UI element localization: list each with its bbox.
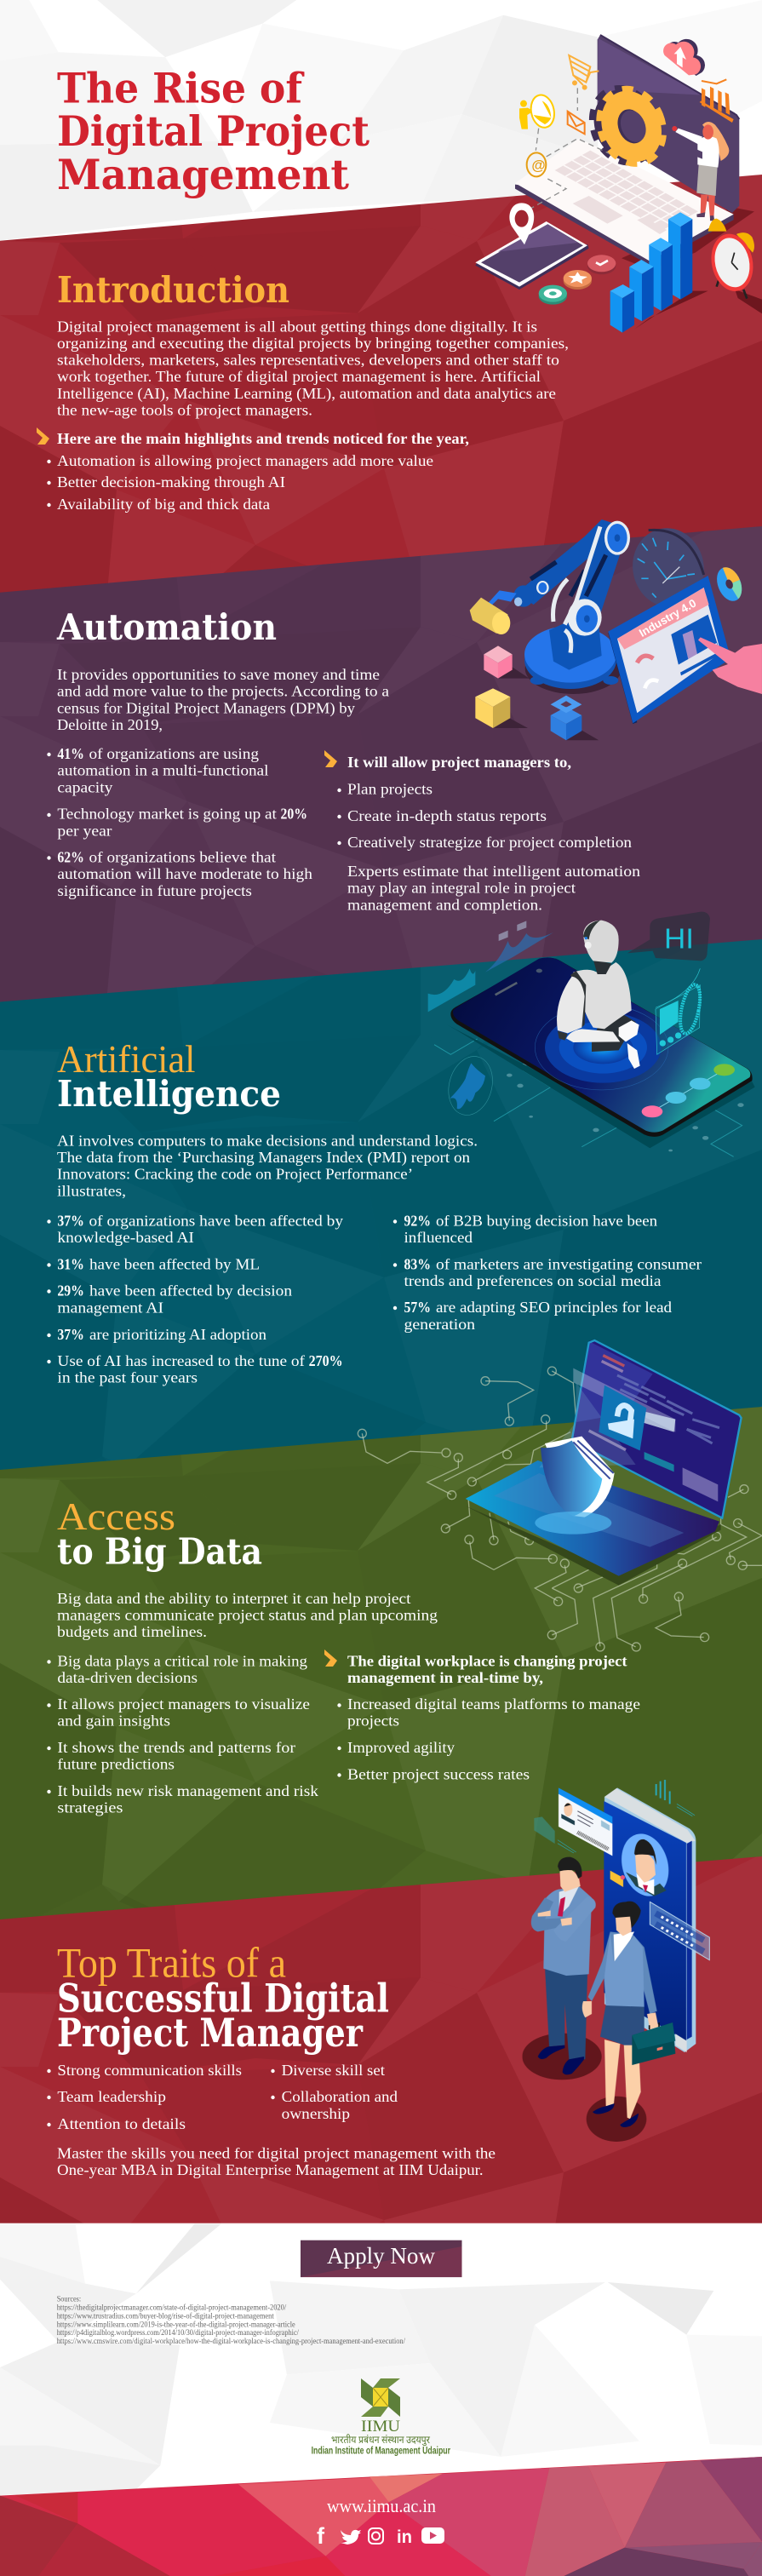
laptop bbox=[466, 1340, 742, 1586]
AI paragraph: illustrates, bbox=[57, 1183, 126, 1200]
automation statistics list: of organizations believe that bbox=[89, 848, 276, 865]
data dots bbox=[507, 1064, 744, 1151]
digital workplace list: The digital workplace is changing project bbox=[347, 1652, 627, 1669]
icon: shopping cart bbox=[569, 55, 599, 89]
icon: gear bbox=[583, 78, 672, 173]
man bbox=[522, 1857, 602, 2080]
heading: artificial intelligence: Artificial bbox=[57, 1037, 196, 1081]
automation paragraph: It provides opportunities to save money and time bbox=[57, 666, 380, 683]
automation statistics list: 20% bbox=[281, 806, 307, 823]
project manager list: Plan projects bbox=[347, 781, 433, 798]
highlights list: Here are the main highlights and trends noticed for the year, bbox=[57, 430, 469, 447]
project manager list: Creatively strategize for project completion bbox=[347, 834, 632, 851]
icon: growth chart bbox=[700, 79, 734, 123]
automation statistics list: capacity bbox=[57, 778, 112, 795]
traits list right: ownership bbox=[282, 2105, 350, 2122]
robot arm bbox=[487, 519, 630, 694]
illustration: robot arm and industry 4.0 tablet bbox=[470, 519, 762, 740]
heading: top traits: Top Traits of a bbox=[57, 1939, 286, 1987]
smartphone bbox=[447, 957, 755, 1148]
tablet: industry 4.0: Industry 4.0 bbox=[637, 597, 698, 640]
AI statistics left column: management AI bbox=[57, 1299, 163, 1316]
icon: youtube bbox=[421, 2527, 444, 2544]
introduction paragraph bbox=[57, 318, 569, 419]
automation statistics list: 62% bbox=[57, 848, 84, 865]
pink cube bbox=[484, 645, 530, 679]
website url: www.iimu.ac.in bbox=[327, 2495, 436, 2516]
laptop bbox=[515, 35, 754, 270]
AI statistics right column: 83% bbox=[404, 1255, 431, 1272]
logo: IIMU: भारतीय प्रबंधन संस्थान उदयपुर bbox=[331, 2434, 431, 2447]
tablet: industry 4.0 bbox=[608, 576, 730, 724]
heading: artificial intelligence bbox=[57, 1037, 281, 1115]
automation statistics list: significance in future projects bbox=[57, 882, 252, 899]
AI paragraph: AI involves computers to make decisions and understand logics. bbox=[57, 1133, 478, 1150]
heading: top traits: Project Manager bbox=[57, 2010, 364, 2056]
area charts bbox=[428, 921, 553, 1012]
title bbox=[57, 64, 370, 199]
automation statistics list: Technology market is going up at bbox=[57, 806, 277, 823]
icon: linkedin: in bbox=[397, 2527, 412, 2547]
AI statistics right column: of marketers are investigating consumer bbox=[436, 1255, 702, 1272]
traits list right: Diverse skill set bbox=[282, 2062, 385, 2079]
big data left list: future predictions bbox=[57, 1756, 175, 1773]
yellow cube bbox=[475, 688, 528, 728]
pie chart icon bbox=[713, 564, 747, 605]
highlights list: Availability of big and thick data bbox=[57, 496, 270, 513]
automation statistics list bbox=[47, 745, 312, 899]
icon: arrow marker bbox=[37, 427, 49, 445]
AI statistics left column: 29% bbox=[57, 1282, 84, 1299]
automation statistics list: 41% bbox=[57, 745, 84, 762]
button: apply now: Apply Now bbox=[327, 2243, 435, 2269]
icon: facebook: f bbox=[317, 2523, 325, 2549]
blue container bbox=[551, 696, 599, 740]
panel: automation background bbox=[0, 526, 762, 1001]
project manager list: may play an integral role in project bbox=[347, 879, 576, 896]
project manager list: It will allow project managers to, bbox=[347, 754, 571, 771]
big data paragraph: Big data and the ability to interpret it can help project bbox=[57, 1590, 410, 1607]
panel: introduction background bbox=[0, 175, 762, 593]
icon: envelope bbox=[568, 112, 585, 134]
lower white panel background bbox=[0, 2223, 762, 2576]
big data left list: It allows project managers to visualize bbox=[57, 1695, 310, 1713]
title: Management bbox=[57, 150, 349, 199]
AI statistics left column: 270% bbox=[309, 1352, 343, 1369]
introduction paragraph: organizing and executing the digital projects by bringing together companies, bbox=[57, 335, 569, 352]
big data left list: strategies bbox=[57, 1799, 123, 1816]
lock card bbox=[599, 1386, 646, 1450]
automation paragraph: census for Digital Project Managers (DPM) by bbox=[57, 699, 355, 717]
automation statistics list: per year bbox=[57, 823, 112, 840]
sources: https://thedigitalprojectmanager.com/state-of-digital-project-management-2020/ bbox=[57, 2303, 287, 2313]
robot bbox=[557, 921, 640, 1069]
big data paragraph: managers communicate project status and plan upcoming bbox=[57, 1607, 438, 1624]
AI statistics right column: 57% bbox=[404, 1299, 431, 1316]
icon: person with pie chart bbox=[519, 93, 557, 129]
big data left list bbox=[47, 1652, 318, 1816]
glowing rings bbox=[535, 1005, 668, 1090]
icon: arrow marker bbox=[324, 1649, 337, 1667]
icon: at sign bbox=[527, 152, 546, 176]
heading: access to big data bbox=[57, 1495, 262, 1572]
traits list left: Strong communication skills bbox=[57, 2062, 242, 2079]
heading: automation: Automation bbox=[56, 606, 277, 648]
automation statistics list: automation will have moderate to high bbox=[57, 865, 312, 882]
AI statistics right column: 92% bbox=[404, 1213, 431, 1230]
logo: IIMU: Indian Institute of Management Udaipur bbox=[312, 2447, 450, 2457]
icon: instagram bbox=[369, 2528, 383, 2544]
heading: top traits: Successful Digital bbox=[57, 1975, 389, 2021]
sources: Sources: bbox=[57, 2296, 81, 2304]
icon: arrow marker bbox=[324, 750, 337, 767]
traits list left: Attention to details bbox=[57, 2115, 186, 2132]
illustration: AI robot on smartphone bbox=[428, 912, 755, 1156]
shield bbox=[535, 1437, 615, 1535]
dashed connector lines bbox=[528, 88, 609, 210]
big data paragraph bbox=[57, 1590, 438, 1640]
logo: IIMU bbox=[312, 2378, 450, 2457]
panel: top traits background bbox=[0, 1856, 762, 2223]
social icons bbox=[317, 2523, 444, 2549]
AI statistics left column: 37% bbox=[57, 1326, 84, 1343]
holographic panel bbox=[656, 968, 704, 1054]
digital workplace list: management in real-time by, bbox=[347, 1669, 543, 1686]
AI statistics right column: influenced bbox=[404, 1229, 473, 1246]
sources: https://www.simplilearn.com/2019-is-the-year-of-the-digital-project-manager-article bbox=[57, 2321, 295, 2330]
AI statistics left column bbox=[47, 1213, 343, 1386]
digital workplace list: Increased digital teams platforms to manage bbox=[347, 1695, 640, 1713]
header low-poly background bbox=[0, 0, 762, 240]
big data paragraph: budgets and timelines. bbox=[57, 1623, 207, 1640]
big data left list: It shows the trends and patterns for bbox=[57, 1739, 295, 1756]
sources bbox=[57, 2296, 405, 2346]
closing paragraph: One-year MBA in Digital Enterprise Management at IIM Udaipur. bbox=[57, 2161, 484, 2178]
circuit traces bbox=[358, 1367, 762, 1651]
traits list left: Team leadership bbox=[57, 2088, 166, 2105]
heading: access to big data: Access bbox=[57, 1495, 175, 1538]
highlights list: Automation is allowing project managers add more value bbox=[57, 452, 433, 469]
big data left list: It builds new risk management and risk bbox=[57, 1782, 318, 1799]
highlights list bbox=[47, 430, 469, 513]
AI statistics right column: trends and preferences on social media bbox=[404, 1272, 661, 1289]
sources: https://www.cmswire.com/digital-workplace/how-the-digital-workplace-is-changing-project-management-and-execution/ bbox=[57, 2338, 405, 2346]
bar chart bbox=[610, 212, 708, 333]
AI statistics right column: of B2B buying decision have been bbox=[436, 1213, 657, 1230]
AI statistics left column: in the past four years bbox=[57, 1369, 198, 1386]
digital workplace list: Improved agility bbox=[347, 1739, 455, 1756]
panel: big data background bbox=[0, 1407, 762, 1919]
AI paragraph: The data from the ‘Purchasing Managers Index (PMI) report on bbox=[57, 1149, 470, 1167]
automation paragraph: Deloitte in 2019, bbox=[57, 716, 163, 733]
traits list left bbox=[47, 2062, 242, 2132]
wall clock bbox=[626, 521, 711, 614]
project manager list: Experts estimate that intelligent automation bbox=[347, 863, 640, 880]
sources: https://p4digitalblog.wordpress.com/2014/10/30/digital-project-manager-infographic/ bbox=[57, 2328, 299, 2338]
ID card bbox=[559, 1787, 612, 1856]
illustration: business people with ID phone bbox=[522, 1780, 709, 2142]
automation statistics list: automation in a multi-functional bbox=[57, 761, 268, 778]
pointing hand bbox=[698, 637, 762, 694]
colored app dots bbox=[642, 1064, 735, 1117]
highlights list: Better decision-making through AI bbox=[57, 473, 285, 491]
AI statistics left column: Use of AI has increased to the tune of bbox=[57, 1352, 305, 1369]
introduction paragraph: Intelligence (AI), Machine Learning (ML), automation and data analytics are bbox=[57, 385, 556, 403]
AI statistics right column bbox=[393, 1213, 702, 1333]
heading: access to big data: to Big Data bbox=[57, 1531, 262, 1572]
decorative data graphics bbox=[534, 1780, 695, 1853]
automation paragraph: and add more value to the projects. According to a bbox=[57, 682, 389, 699]
blue star graphic bbox=[442, 1052, 499, 1120]
AI statistics left column: 31% bbox=[57, 1255, 84, 1272]
icon: alarm clock bbox=[706, 219, 762, 313]
closing paragraph: Master the skills you need for digital project management with the bbox=[57, 2144, 496, 2161]
large smartphone bbox=[604, 1787, 709, 2052]
AI statistics left column: 37% bbox=[57, 1213, 84, 1230]
big data left list: Big data plays a critical role in making bbox=[57, 1652, 307, 1669]
introduction paragraph: the new-age tools of project managers. bbox=[57, 402, 312, 419]
illustration: laptop with gear and icons bbox=[475, 35, 762, 333]
sources: https://www.trustradius.com/buyer-blog/rise-of-digital-project-management bbox=[57, 2312, 274, 2321]
heading: artificial intelligence: Intelligence bbox=[57, 1073, 281, 1115]
icon: cloud upload bbox=[663, 39, 705, 76]
introduction paragraph: Digital project management is all about getting things done digitally. It is bbox=[57, 318, 537, 336]
logo: IIMU: IIMU bbox=[361, 2418, 400, 2435]
title: The Rise of bbox=[57, 64, 305, 113]
closing paragraph bbox=[57, 2144, 496, 2178]
AI statistics left column: are prioritizing AI adoption bbox=[89, 1326, 266, 1343]
circuit lines bbox=[434, 1039, 742, 1156]
AI paragraph: Innovators: Cracking the code on Project Performance’ bbox=[57, 1166, 413, 1183]
speech bubble: HI: HI bbox=[664, 923, 694, 955]
digital workplace list bbox=[337, 1652, 640, 1783]
introduction paragraph: stakeholders, marketers, sales representatives, developers and other staff to bbox=[57, 352, 559, 369]
button: apply now bbox=[301, 2240, 461, 2277]
project manager list: management and completion. bbox=[347, 896, 542, 913]
AI statistics left column: knowledge-based AI bbox=[57, 1229, 194, 1246]
traits list right bbox=[271, 2062, 398, 2122]
AI statistics right column: generation bbox=[404, 1316, 475, 1333]
automation paragraph bbox=[57, 666, 389, 733]
AI statistics left column: of organizations have been affected by bbox=[89, 1213, 343, 1230]
illustration: secure laptop with circuits bbox=[358, 1340, 762, 1651]
AI statistics right column: are adapting SEO principles for lead bbox=[436, 1299, 672, 1316]
woman bbox=[582, 1902, 658, 2142]
big data left list: and gain insights bbox=[57, 1713, 170, 1730]
footer band bbox=[0, 2457, 762, 2576]
icon: location pin on phone bbox=[475, 203, 589, 290]
project manager list bbox=[337, 754, 640, 913]
speech bubble: HI bbox=[627, 912, 710, 961]
AI statistics left column: have been affected by ML bbox=[89, 1255, 260, 1272]
digital workplace list: projects bbox=[347, 1713, 399, 1730]
yellow cylinder bbox=[470, 598, 510, 634]
project manager list: Create in-depth status reports bbox=[347, 807, 547, 824]
digital workplace list: Better project success rates bbox=[347, 1766, 530, 1783]
round app badges bbox=[539, 255, 616, 305]
presenter figure bbox=[672, 122, 729, 221]
traits list right: Collaboration and bbox=[282, 2088, 398, 2105]
icon: twitter bbox=[341, 2530, 361, 2544]
big data left list: data-driven decisions bbox=[57, 1669, 198, 1686]
briefcase bbox=[632, 2022, 675, 2065]
introduction paragraph: work together. The future of digital project management is here. Artificial bbox=[57, 368, 541, 385]
automation statistics list: of organizations are using bbox=[89, 745, 259, 762]
AI statistics left column: have been affected by decision bbox=[89, 1282, 292, 1299]
panel: artificial intelligence background bbox=[0, 939, 762, 1470]
heading: introduction: Introduction bbox=[57, 269, 289, 311]
title: Digital Project bbox=[57, 106, 370, 156]
heading: top traits bbox=[57, 1939, 389, 2056]
icon: at sign: @ bbox=[531, 157, 546, 173]
AI paragraph bbox=[57, 1133, 478, 1200]
